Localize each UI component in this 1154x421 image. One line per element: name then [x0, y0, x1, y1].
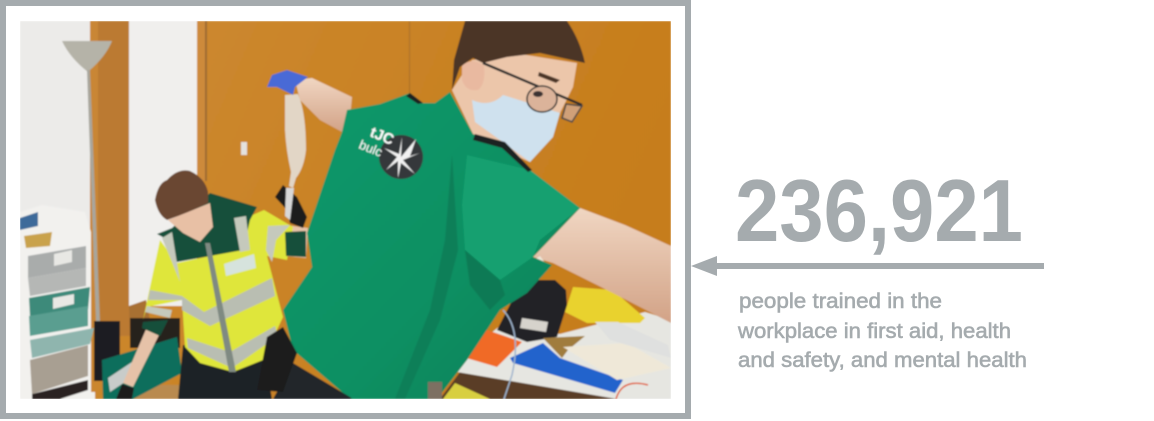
equipment bags on floor [94, 321, 182, 399]
caption text [737, 289, 1027, 372]
wall and wood background [20, 21, 671, 399]
caption text: and safety, and mental health [738, 348, 1027, 372]
panel: photo frame [3, 3, 688, 416]
table with equipment [440, 280, 671, 399]
caption text: workplace in first aid, health [737, 319, 1011, 343]
trolley with drawers [20, 205, 95, 399]
paramedic in hi-vis jacket [116, 170, 308, 399]
neck and face [452, 54, 577, 162]
IV fluid bag [285, 94, 306, 220]
arrow pointing to photo [691, 256, 1044, 276]
white cuff under sleeve [536, 256, 545, 262]
statistic number: 236,921 [735, 161, 1023, 260]
photo: first aid trainers [20, 21, 671, 399]
floor lamp [62, 41, 112, 322]
St John badge: bulc [357, 137, 385, 160]
St John badge: tJC [368, 124, 396, 149]
green uniform [283, 92, 580, 399]
outstretched arm [533, 208, 671, 323]
head: hair, mask and glasses [452, 21, 585, 162]
caption text: people trained in the [739, 289, 942, 313]
raised arm and blue glove [267, 70, 352, 132]
collar strap [473, 134, 532, 172]
utility belt and holster [257, 327, 442, 399]
St John badge [357, 124, 423, 179]
